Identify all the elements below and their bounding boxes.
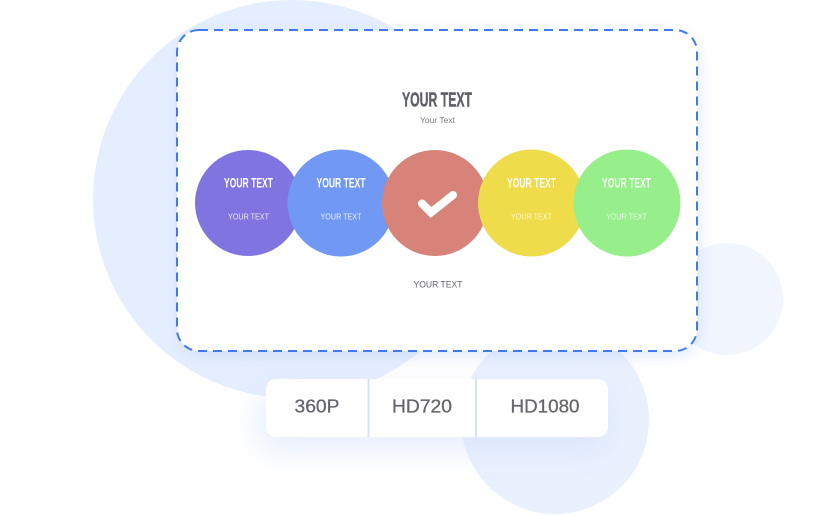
option: 360P: 360P (294, 396, 340, 417)
background circle: small right (671, 243, 783, 355)
circle: purple: YOUR TEXT (224, 176, 273, 190)
heading: YOUR TEXT (402, 90, 472, 112)
circle: green: YOUR TEXT (606, 212, 647, 222)
circle: blue: YOUR TEXT (316, 176, 366, 190)
resolution selector bar (258, 379, 608, 450)
circle: blue: YOUR TEXT (320, 212, 362, 222)
preview card (177, 30, 697, 354)
background circle: large (93, 0, 491, 398)
circle: yellow (478, 150, 585, 256)
circle: blue (288, 150, 394, 256)
bottom label: YOUR TEXT (414, 280, 463, 290)
option: HD720: HD720 (392, 396, 452, 417)
subheading: Your Text (420, 115, 456, 125)
circle: green (574, 150, 680, 256)
background circle: bottom right (461, 326, 649, 514)
circle: green: YOUR TEXT (602, 176, 651, 190)
circle: red with check icon (382, 150, 488, 256)
circle: purple: YOUR TEXT (228, 212, 269, 222)
circle: purple (195, 150, 301, 256)
option: HD1080: HD1080 (510, 396, 580, 417)
circle: yellow: YOUR TEXT (507, 176, 556, 190)
circle: yellow: YOUR TEXT (511, 212, 552, 222)
